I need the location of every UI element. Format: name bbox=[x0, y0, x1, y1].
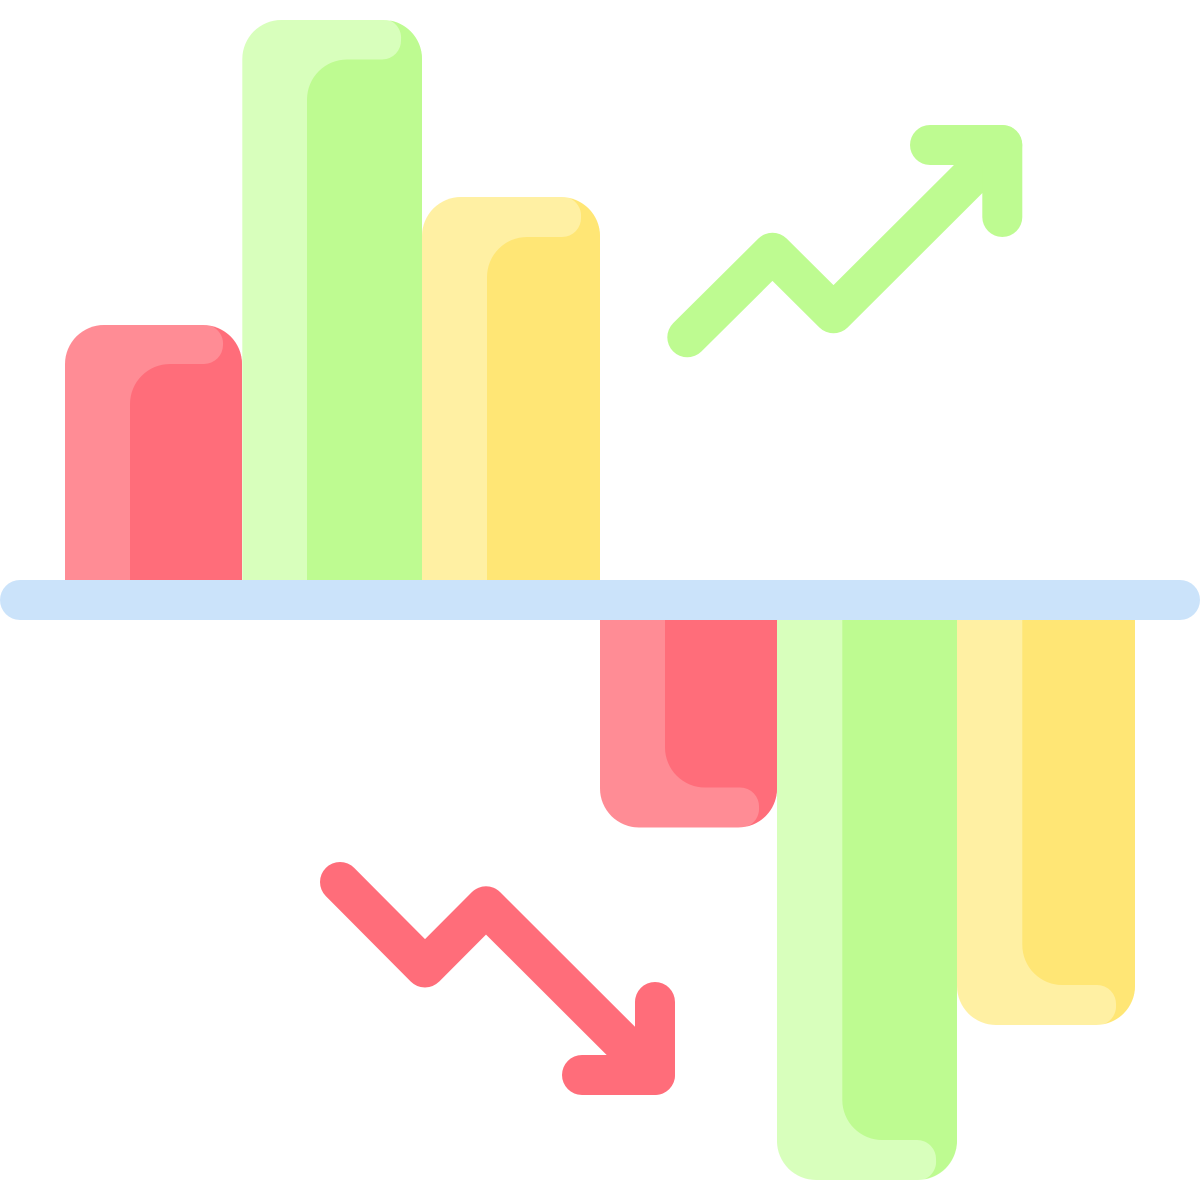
bar: yellow positive bbox=[422, 197, 600, 580]
arrow: downward trend bbox=[340, 882, 655, 1075]
bar: yellow negative bbox=[957, 620, 1135, 1025]
baseline axis bbox=[0, 580, 1200, 620]
bar: green negative bbox=[777, 620, 957, 1180]
bar: green positive bbox=[242, 20, 422, 580]
bar: red negative bbox=[600, 620, 777, 828]
arrow: upward trend bbox=[687, 145, 1002, 337]
bar: red positive bbox=[65, 325, 242, 580]
